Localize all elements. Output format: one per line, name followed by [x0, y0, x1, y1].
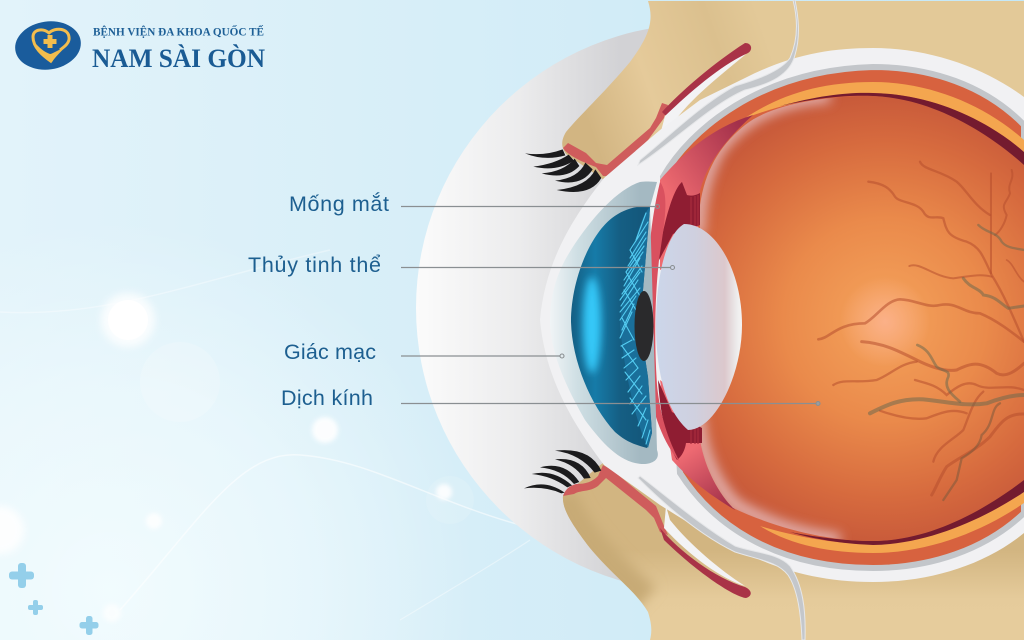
ciliary muscle lower [660, 380, 735, 510]
lens [656, 224, 742, 430]
icon: logo badge [12, 17, 84, 74]
lower eyelashes [524, 450, 601, 493]
dark retinal line upper [780, 93, 1024, 166]
label: Giác mạc [284, 340, 564, 364]
logo [12, 17, 265, 74]
suspensory ligaments [691, 195, 698, 444]
veins [870, 225, 1024, 500]
label: Mống mắt: Mống mắt [289, 191, 389, 216]
label: Mống mắt [289, 191, 660, 216]
hospital name: BỆNH VIỆN ĐA KHOA QUỐC TẾ [93, 24, 264, 38]
upper lid white slit [656, 54, 746, 150]
lower lid shading [560, 495, 645, 600]
label: Thủy tinh thể: Thủy tinh thể [248, 253, 381, 277]
optic muscle lower [638, 476, 805, 640]
label: Giác mạc: Giác mạc [284, 340, 376, 364]
upper lid red strip [662, 43, 751, 118]
ciliary body upper dark [658, 182, 700, 262]
iris fibres [620, 207, 652, 448]
lower eyelid tissue [563, 320, 1024, 640]
corneal highlight [583, 277, 601, 373]
label: Thủy tinh thể [248, 253, 674, 277]
hospital name large: NAM SÀI GÒN [92, 43, 265, 73]
optic muscle upper [638, 0, 798, 165]
anterior chamber [571, 206, 652, 448]
label: Dịch kính: Dịch kính [281, 386, 373, 410]
upper eyelid tissue [562, 1, 1024, 320]
pupil [634, 291, 654, 361]
blood vessels [818, 162, 1024, 500]
ciliary body lower dark [658, 380, 702, 460]
ciliary muscle upper [660, 115, 753, 270]
upper lid lining [563, 103, 668, 176]
cornea [550, 182, 658, 464]
vitreous body [698, 96, 1024, 541]
iris root pink strip [646, 182, 680, 462]
upper eyelashes [525, 149, 601, 192]
orange retinal band upper [745, 82, 1024, 152]
sclera [540, 48, 1024, 582]
lower lid white slit [664, 506, 745, 586]
surrounding grey halo [416, 24, 984, 592]
lower lid red strip [660, 528, 751, 598]
arteries [818, 162, 1024, 495]
decorative light orbs [0, 293, 474, 622]
label: Dịch kính [281, 386, 820, 410]
choroid layer [663, 67, 1024, 568]
lower lid lining [563, 465, 668, 535]
eye anatomy illustration [416, 0, 1024, 640]
orange retinal band lower [760, 492, 1024, 553]
icon: medical crosses [9, 563, 98, 635]
dark retinal line lower [790, 478, 1024, 545]
